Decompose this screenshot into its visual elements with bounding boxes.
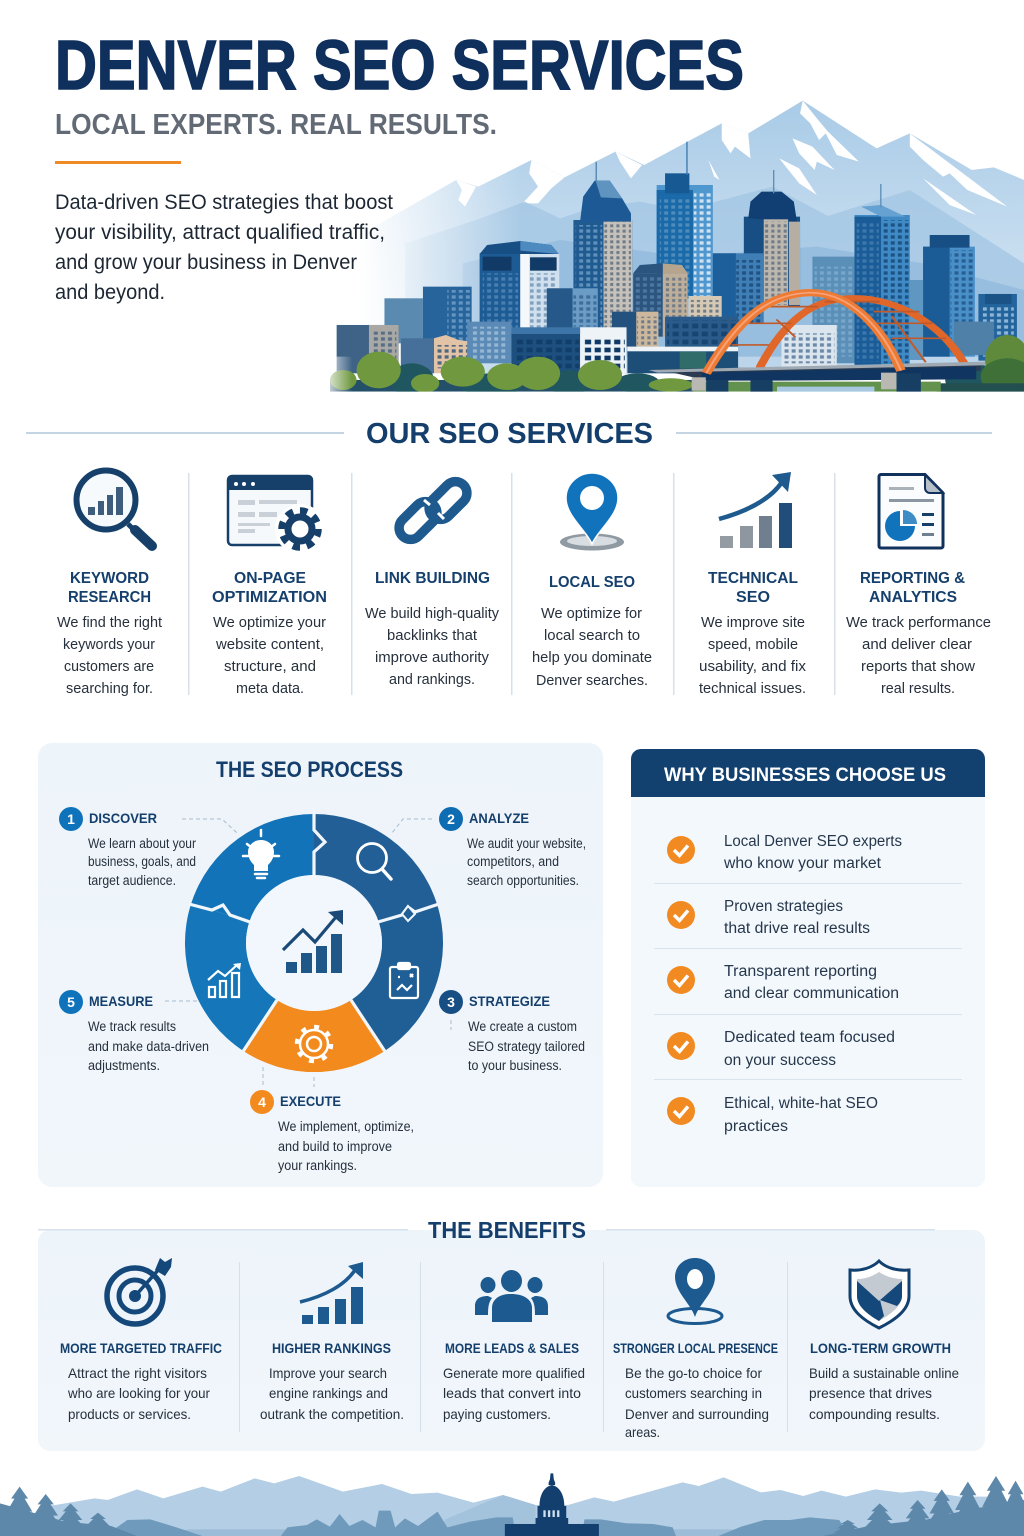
step 4 execute: and build to improve (278, 1139, 392, 1154)
service: technical seo: TECHNICAL (708, 570, 798, 587)
icon: chain links (394, 477, 472, 544)
step 1 discover (59, 807, 196, 888)
heading: the benefits: THE BENEFITS (428, 1217, 586, 1243)
benefit: stronger local presence (613, 1258, 778, 1440)
icon: report document with pie chart (879, 474, 943, 548)
trees (330, 335, 1024, 397)
benefit: long-term growth: presence that drives (809, 1385, 932, 1401)
service: keyword research: We find the right (57, 614, 163, 631)
intro paragraph: Data-driven SEO strategies that boost (55, 191, 393, 214)
benefit: long-term growth: compounding results. (809, 1406, 940, 1422)
panel header: WHY BUSINESSES CHOOSE US (664, 764, 946, 786)
icon: browser window with gear (228, 476, 325, 554)
benefit: stronger local presence: Denver and surrounding (625, 1406, 769, 1422)
section heading: our seo services: OUR SEO SERVICES (366, 418, 653, 450)
service: reporting and analytics: We track performance (846, 614, 991, 631)
panel header (631, 749, 985, 797)
service: local seo: We optimize for (541, 605, 642, 622)
icon: magnifying glass (358, 844, 391, 879)
step 4 execute: your rankings. (278, 1158, 357, 1173)
reason 4 (667, 1029, 895, 1069)
step 2 analyze: search opportunities. (467, 873, 579, 888)
step 3 strategize (439, 990, 585, 1073)
benefit: more leads and sales (443, 1270, 585, 1422)
benefit: more leads and sales: MORE LEADS & SALES (445, 1340, 579, 1356)
service: technical seo: SEO (736, 589, 770, 606)
step 4 execute (250, 1090, 414, 1173)
step 5 measure: 5 (67, 994, 75, 1010)
service: link building: and rankings. (389, 671, 475, 688)
benefit: long-term growth: LONG-TERM GROWTH (810, 1340, 951, 1356)
service: on-page optimization: ON-PAGE (234, 570, 306, 587)
benefit: higher rankings: outrank the competition. (260, 1406, 404, 1422)
service: technical seo: We improve site (701, 614, 805, 631)
service: keyword research (57, 470, 163, 697)
benefit: higher rankings: HIGHER RANKINGS (272, 1340, 391, 1356)
service: on-page optimization: We optimize your (213, 614, 326, 631)
service: on-page optimization (212, 476, 327, 697)
benefit: stronger local presence: areas. (625, 1424, 660, 1440)
reason 2: that drive real results (724, 920, 870, 937)
step 3 strategize: to your business. (468, 1058, 562, 1073)
benefit: long-term growth: Build a sustainable online (809, 1365, 959, 1381)
step 2 analyze: ANALYZE (469, 810, 529, 826)
reason 5: Ethical, white-hat SEO (724, 1095, 878, 1112)
service: link building: improve authority (375, 649, 489, 666)
service: on-page optimization: meta data. (236, 680, 304, 697)
title: DENVER SEO SERVICES (55, 26, 744, 104)
benefit: more targeted traffic: products or services. (68, 1406, 191, 1422)
icon: shield (850, 1261, 909, 1328)
reason 4: on your success (724, 1052, 836, 1069)
service: reporting and analytics: and deliver clear (862, 636, 972, 653)
step 3 strategize: 3 (447, 994, 455, 1010)
icon: bar chart trend (208, 963, 241, 997)
step 2 analyze (439, 807, 586, 888)
icon: location pin with ring (668, 1258, 722, 1324)
benefit: higher rankings: Improve your search (269, 1365, 387, 1381)
reason 3 (667, 963, 899, 1002)
step 3 strategize: We create a custom (468, 1019, 577, 1034)
benefit: more targeted traffic: Attract the right visitors (68, 1365, 207, 1381)
towers back (978, 294, 1017, 361)
service: local seo: help you dominate (532, 649, 652, 666)
step 3 strategize: STRATEGIZE (469, 993, 550, 1009)
benefit: long-term growth (809, 1261, 959, 1422)
tower j (480, 253, 559, 337)
tower d (854, 215, 910, 365)
benefit: stronger local presence: customers searching in (625, 1385, 762, 1401)
intro paragraph (55, 191, 393, 304)
service: technical seo: technical issues. (699, 680, 806, 697)
step 5 measure (59, 990, 209, 1073)
benefit: more targeted traffic: who are looking for your (67, 1385, 210, 1401)
step 4 execute: We implement, optimize, (278, 1119, 414, 1134)
service: local seo: local search to (544, 627, 640, 644)
service: on-page optimization: website content, (215, 636, 324, 653)
heading: the seo process: THE SEO PROCESS (216, 757, 403, 782)
leader lines (165, 819, 451, 1087)
intro paragraph: and beyond. (55, 281, 165, 304)
tower c (744, 217, 800, 307)
icon: people group (475, 1270, 548, 1322)
benefit: more leads and sales: leads that convert into (443, 1385, 581, 1401)
service: on-page optimization: OPTIMIZATION (212, 589, 327, 606)
service: keyword research: keywords your (63, 636, 155, 653)
reason 1: who know your market (723, 855, 882, 872)
step 5 measure: We track results (88, 1019, 176, 1034)
reason 5 (667, 1095, 878, 1135)
reason 4: Dedicated team focused (724, 1029, 895, 1046)
service: link building (365, 477, 499, 688)
accent rule (55, 161, 181, 164)
step 5 measure: MEASURE (89, 993, 153, 1009)
benefit: more leads and sales: Generate more qualified (443, 1365, 585, 1381)
icon: target and arrow (107, 1258, 172, 1324)
icon: gear (297, 1027, 331, 1061)
benefit: higher rankings: engine rankings and (269, 1385, 388, 1401)
icon: map pin (560, 473, 624, 550)
step 1 discover: We learn about your (88, 836, 196, 851)
reason 5: practices (724, 1118, 788, 1135)
service: reporting and analytics: real results. (881, 680, 955, 697)
benefit: higher rankings (260, 1262, 404, 1422)
step 5 measure: and make data-driven (88, 1039, 209, 1054)
panel: the benefits (38, 1217, 985, 1451)
service: technical seo: usability, and fix (699, 658, 807, 675)
icon: rising bars and arrow (719, 472, 792, 548)
tan tower a (573, 220, 632, 333)
reason 1 (667, 833, 902, 872)
bridge (693, 382, 941, 392)
reason 3: and clear communication (724, 985, 899, 1002)
service: link building: backlinks that (387, 627, 478, 644)
subtitle: LOCAL EXPERTS. REAL RESULTS. (55, 109, 497, 141)
intro paragraph: and grow your business in Denver (55, 251, 357, 274)
service: local seo: LOCAL SEO (549, 574, 635, 591)
icon: capitol building (505, 1473, 599, 1536)
step 2 analyze: We audit your website, (467, 836, 586, 851)
service: keyword research: KEYWORD (70, 570, 149, 587)
step 4 execute: 4 (258, 1094, 266, 1110)
icon: clipboard strategy (390, 963, 418, 998)
step 2 analyze: 2 (447, 811, 455, 827)
step 3 strategize: SEO strategy tailored (468, 1039, 585, 1054)
panel: the seo process (38, 743, 603, 1187)
step 4 execute: EXECUTE (280, 1093, 341, 1109)
benefit: more leads and sales: paying customers. (443, 1406, 551, 1422)
step 2 analyze: competitors, and (467, 854, 559, 869)
icon: light bulb (243, 830, 279, 878)
service: reporting and analytics: ANALYTICS (869, 589, 957, 606)
service: keyword research: RESEARCH (68, 589, 151, 606)
service: technical seo: speed, mobile (708, 636, 798, 653)
service: link building: We build high-quality (365, 605, 499, 622)
step 1 discover: business, goals, and (88, 854, 196, 869)
icon: magnifier (76, 470, 152, 546)
tower e (923, 247, 975, 357)
step 5 measure: adjustments. (88, 1058, 160, 1073)
benefit: stronger local presence: Be the go-to choice for (625, 1365, 762, 1381)
icon: central growth chart (283, 910, 343, 973)
reason 2: Proven strategies (724, 898, 843, 915)
service: local seo: Denver searches. (536, 672, 648, 689)
intro paragraph: your visibility, attract qualified traffic, (55, 221, 385, 244)
reason 3: Transparent reporting (724, 963, 877, 980)
icon: rising bars (300, 1262, 363, 1324)
benefit: stronger local presence: STRONGER LOCAL PRESENCE (613, 1340, 778, 1356)
process wheel (185, 808, 443, 1072)
service: technical seo (699, 472, 807, 697)
service: local seo (532, 473, 652, 689)
reason 1: Local Denver SEO experts (724, 833, 902, 850)
step 1 discover: target audience. (88, 873, 176, 888)
service: keyword research: customers are (64, 658, 154, 675)
tower h (713, 253, 764, 323)
service: reporting and analytics: REPORTING & (860, 570, 965, 587)
step 1 discover: 1 (67, 811, 75, 827)
service: keyword research: searching for. (66, 680, 153, 697)
panel: why businesses choose us (631, 749, 985, 1187)
service: on-page optimization: structure, and (224, 658, 316, 675)
service: reporting and analytics: reports that show (861, 658, 975, 675)
service: reporting and analytics (846, 474, 991, 697)
service: link building: LINK BUILDING (375, 570, 490, 587)
reason 2 (667, 898, 870, 937)
hero illustration: mountains, skyline and bridge (308, 101, 1024, 402)
benefit: more targeted traffic (60, 1258, 222, 1422)
benefit: more targeted traffic: MORE TARGETED TRAFFIC (60, 1340, 222, 1356)
footer skyline: mountains, capitol and pines (0, 1473, 1024, 1536)
step 1 discover: DISCOVER (89, 810, 157, 826)
